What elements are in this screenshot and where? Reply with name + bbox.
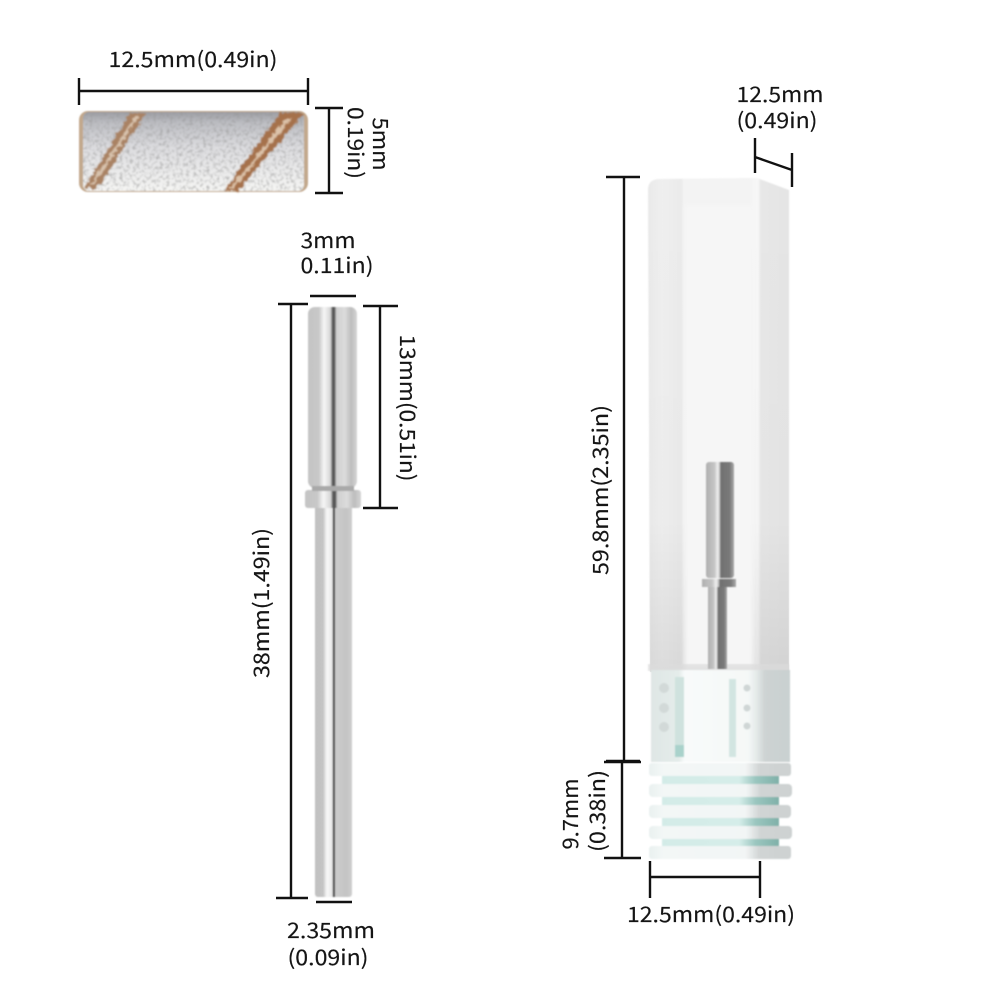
- dimension: case width top: (0.49in): [736, 105, 818, 135]
- sanding band: [79, 111, 308, 192]
- dimension: band length: 12.5mm(0.49in): [108, 44, 278, 74]
- dimension: mandrel head length: 13mm(0.51in): [393, 334, 423, 482]
- dimension: base height: (0.38in): [582, 770, 612, 852]
- dimension: case width top: 12.5mm: [736, 79, 824, 109]
- storage case: [648, 178, 792, 859]
- dimension: base width: [627, 861, 795, 929]
- dimension: base height: [555, 762, 641, 858]
- dimension: mandrel head diameter: [300, 225, 374, 296]
- dimension: mandrel total length: 38mm(1.49in): [246, 528, 276, 678]
- dimension: band diameter: [315, 107, 396, 193]
- dimension: mandrel head diameter: 0.11in): [300, 250, 374, 280]
- dimension: case length: 59.8mm(2.35in): [585, 405, 615, 575]
- dimension: case length: [585, 177, 640, 761]
- dimension: mandrel shank diameter: [287, 902, 375, 972]
- dimension: base width: 12.5mm(0.49in): [627, 899, 795, 929]
- dimension: mandrel shank diameter: (0.09in): [288, 942, 368, 972]
- mandrel bit: [305, 307, 361, 897]
- dimension: case width top: [736, 79, 824, 187]
- mandrel inside case: [702, 462, 736, 669]
- threaded base: [649, 763, 792, 859]
- abrasive seam left: [84, 113, 146, 188]
- dimension: band diameter: 5mm: [366, 118, 396, 170]
- abrasive seam right: [224, 113, 304, 191]
- dimension: band diameter: 0.19in): [341, 107, 371, 179]
- case collar: [651, 670, 790, 762]
- dimension: mandrel head diameter: 3mm: [300, 225, 356, 255]
- dimension: mandrel total length: [246, 304, 308, 898]
- dimension: mandrel shank diameter: 2.35mm: [287, 915, 375, 945]
- dimension: band length: [79, 44, 308, 105]
- transparent case body: [648, 178, 789, 672]
- dimension: mandrel head length: [363, 306, 423, 508]
- dimension: base height: 9.7mm: [555, 778, 585, 850]
